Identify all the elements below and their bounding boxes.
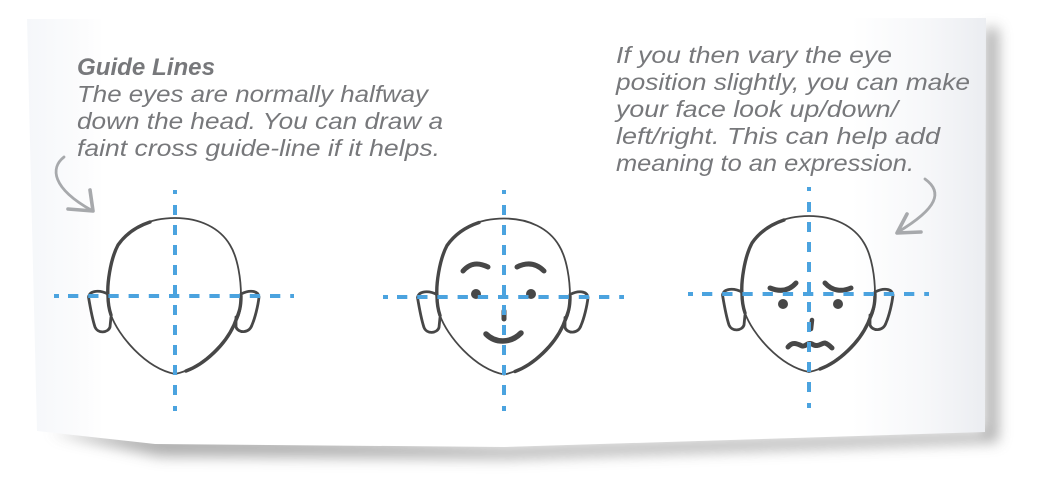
wavy mouth — [788, 343, 832, 348]
nose — [502, 311, 506, 319]
face: smiling head with guide lines — [383, 190, 624, 412]
text block: eye position explanation — [614, 42, 970, 176]
arrow: right curved arrow — [897, 179, 935, 233]
text block: eye position explanation: meaning to an expression. — [616, 150, 914, 176]
text block: guide lines explanation: down the head. You can draw a — [77, 108, 443, 134]
face: worried head looking down with guide lines — [688, 187, 929, 410]
right eyebrow — [825, 283, 851, 290]
left eyebrow — [463, 264, 488, 271]
text block: eye position explanation: your face look up/down/ — [614, 96, 901, 122]
text block: eye position explanation: If you then vary the eye — [616, 42, 892, 68]
nose — [811, 320, 812, 329]
text block: guide lines explanation: faint cross guide-line if it helps. — [77, 135, 440, 161]
right eyebrow — [517, 264, 544, 271]
smile — [486, 333, 521, 341]
eyes — [471, 289, 536, 299]
face: blank head with guide lines — [54, 190, 294, 412]
text block: eye position explanation: left/right. This can help add — [616, 123, 941, 149]
left eyebrow — [770, 283, 796, 290]
text block: guide lines explanation: The eyes are normally halfway — [77, 81, 430, 107]
heading: Guide Lines: Guide Lines — [77, 54, 215, 81]
text block: guide lines explanation — [77, 81, 443, 161]
arrow: left curved arrow — [56, 157, 93, 211]
text block: eye position explanation: position slightly, you can make — [615, 69, 970, 95]
eyes — [778, 299, 843, 309]
